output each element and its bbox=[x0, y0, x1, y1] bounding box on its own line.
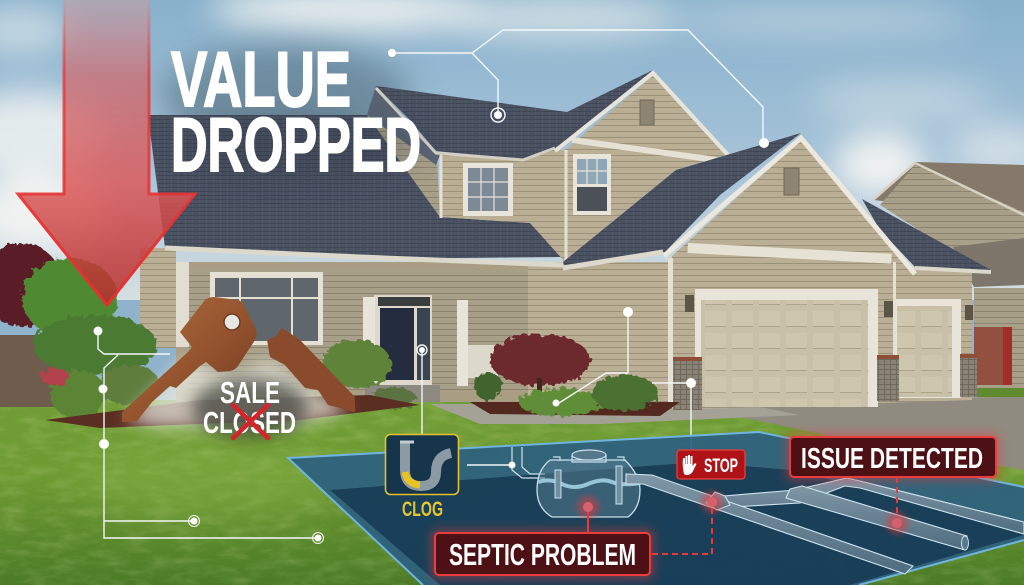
sky background bbox=[0, 0, 1024, 300]
large front roof bbox=[563, 133, 801, 268]
main roof bbox=[148, 115, 563, 259]
landscaping bbox=[0, 243, 680, 428]
white leader lines: top bbox=[388, 30, 769, 148]
broken key and sale closed bbox=[122, 297, 355, 440]
right roof of garage wing bbox=[862, 199, 991, 270]
stop text: STOP bbox=[704, 456, 738, 477]
title: value dropped: DROPPED bbox=[171, 103, 421, 188]
red x bbox=[233, 405, 268, 438]
title: value dropped: VALUE bbox=[171, 35, 351, 123]
underground cutaway panel bbox=[288, 432, 1024, 585]
middle upper walls bbox=[440, 150, 565, 262]
title backdrop shadow on roof bbox=[170, 115, 420, 175]
porch bbox=[188, 270, 528, 390]
septic problem callout bbox=[431, 529, 654, 579]
clog label: CLOG bbox=[402, 498, 443, 521]
hand icon bbox=[683, 455, 696, 475]
garage door 2 bbox=[896, 299, 961, 398]
wall lamps bbox=[685, 295, 694, 312]
tank bbox=[537, 460, 640, 517]
lawn bbox=[0, 400, 1024, 585]
white leader lines: left lawn bbox=[94, 326, 324, 544]
issue detected callout bbox=[786, 433, 1000, 481]
garage door 1 bbox=[695, 289, 878, 407]
callout text: SEPTIC PROBLEM bbox=[449, 537, 636, 572]
red problem markers bbox=[577, 477, 908, 554]
upper windows bbox=[463, 163, 513, 216]
sale text: SALE bbox=[220, 375, 280, 410]
upper roof bbox=[376, 70, 653, 160]
stop badge bbox=[677, 450, 745, 479]
closed text: CLOSED bbox=[203, 405, 296, 440]
white leader lines: yard bbox=[417, 307, 696, 450]
brick pillars bbox=[673, 357, 702, 410]
septic tank and drain field bbox=[467, 447, 1024, 574]
upper gable wall bbox=[563, 76, 725, 262]
key broken half bbox=[267, 328, 355, 412]
inlet pipe bbox=[512, 447, 545, 478]
lower walls bbox=[140, 248, 176, 348]
pipe trap bbox=[405, 442, 451, 486]
driveway and walkway bbox=[430, 388, 1024, 470]
red down arrow bbox=[18, 0, 195, 305]
key head and blade bbox=[122, 297, 257, 422]
white halo behind key bbox=[125, 360, 350, 428]
house bbox=[140, 70, 991, 410]
key hole bbox=[224, 314, 240, 330]
clog icon bbox=[386, 434, 458, 494]
dark halo behind text bbox=[192, 378, 308, 438]
neighboring house bbox=[873, 162, 1024, 400]
garage wall bbox=[672, 140, 972, 410]
title: value dropped bbox=[171, 35, 421, 188]
drain pipes bbox=[626, 474, 1024, 574]
